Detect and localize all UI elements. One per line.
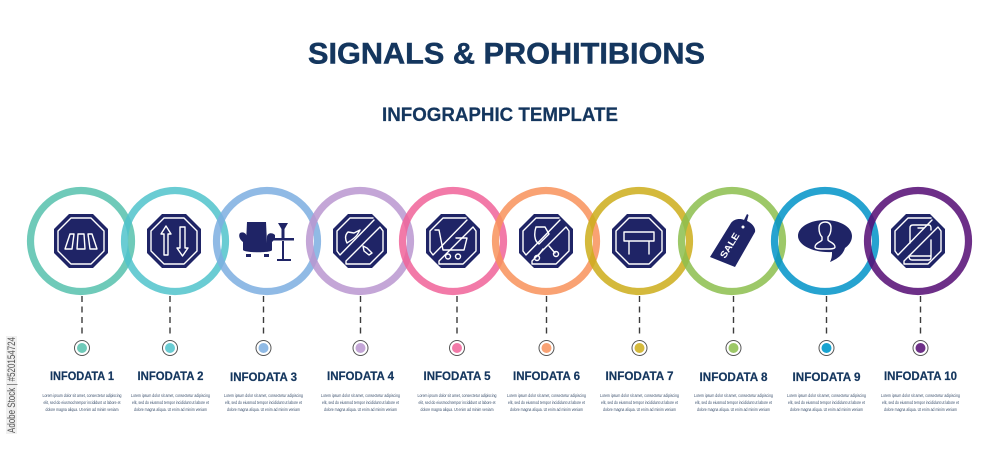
text block: infodata 10: Lorem ipsum dolor sit amet, consectetur adipiscing	[881, 393, 961, 398]
ring: infodata 7	[588, 190, 690, 292]
text block: infodata 1: INFODATA 1	[50, 371, 115, 383]
ring: infodata 8	[682, 190, 782, 292]
connector 6 with node	[539, 296, 554, 356]
icon: sale tag	[710, 214, 755, 267]
text block: infodata 7: dolore magna aliqua. Ut enim ad minim veniam	[603, 407, 676, 412]
text block: infodata 2: dolore magna aliqua. Ut enim ad minim veniam	[134, 407, 207, 412]
icon: road narrowing sign	[54, 214, 108, 268]
text block: infodata 3: INFODATA 3	[230, 372, 297, 384]
text block: infodata 9: elit, sed do eiusmod tempor incididunt ut labore et	[788, 400, 866, 405]
text block: infodata 10	[881, 371, 961, 412]
icon: person in speech bubble	[798, 220, 852, 262]
text block: infodata 5	[418, 371, 497, 412]
text block: infodata 7: Lorem ipsum dolor sit amet, consectetur adipiscing	[600, 393, 680, 398]
text block: infodata 1	[42, 371, 122, 412]
text block: infodata 3	[224, 372, 304, 412]
ring: infodata 3	[216, 190, 318, 292]
text block: infodata 3: Lorem ipsum dolor sit amet, consectetur adipiscing	[224, 393, 304, 398]
text block: infodata 6	[507, 371, 587, 412]
icon: armchair and side table	[239, 222, 294, 261]
text block: infodata 4: Lorem ipsum dolor sit amet, consectetur adipiscing	[321, 393, 401, 398]
text block: infodata 5: INFODATA 5	[424, 371, 491, 383]
icon: table sign	[612, 214, 666, 268]
text block: infodata 4	[321, 371, 401, 412]
icon: two way traffic sign	[147, 214, 201, 268]
text block: infodata 8	[694, 372, 774, 412]
text block: infodata 5: dolore magna aliqua. Ut enim ad minim veniam	[420, 407, 494, 412]
text block: infodata 2: elit, sed do eiusmod tempor incididunt ut labore et	[132, 400, 210, 405]
ring: infodata 5	[402, 190, 504, 292]
ring: infodata 9	[774, 190, 876, 292]
text block: infodata 2: Lorem ipsum dolor sit amet, consectetur adipiscing	[131, 393, 211, 398]
text block: infodata 8: dolore magna aliqua. Ut enim ad minim veniam	[697, 407, 770, 412]
text block: infodata 3: dolore magna aliqua. Ut enim ad minim veniam	[227, 407, 300, 412]
text block: infodata 5: Lorem ipsum dolor sit amet, consectetur adipiscing	[418, 393, 497, 398]
title: SIGNALS & PROHITIBIONS	[308, 38, 705, 70]
icon: no mobile phone sign	[891, 214, 945, 268]
connector 7 with node	[632, 296, 647, 356]
text block: infodata 4: INFODATA 4	[327, 371, 395, 383]
connector 9 with node	[819, 296, 834, 356]
icon: sale tag: SALE	[718, 231, 742, 261]
text block: infodata 4: dolore magna aliqua. Ut enim ad minim veniam	[324, 407, 397, 412]
icon: no baby stroller sign	[519, 214, 573, 268]
text block: infodata 6: Lorem ipsum dolor sit amet, consectetur adipiscing	[507, 393, 587, 398]
ring: infodata 1	[30, 190, 132, 292]
text block: infodata 1: elit, sed do eiusmod tempor incididunt ut labore et	[44, 400, 121, 405]
icon: no shopping cart sign	[426, 214, 480, 268]
connector 2 with node	[162, 296, 178, 356]
text block: infodata 9: INFODATA 9	[792, 372, 860, 384]
connector 1 with node	[74, 296, 90, 356]
text block: infodata 6: elit, sed do eiusmod tempor incididunt ut labore et	[508, 400, 586, 405]
text block: infodata 7	[600, 371, 680, 412]
text block: infodata 6: dolore magna aliqua. Ut enim ad minim veniam	[510, 407, 583, 412]
ring: infodata 4	[310, 190, 410, 292]
text block: infodata 9: dolore magna aliqua. Ut enim ad minim veniam	[790, 407, 863, 412]
text block: infodata 10: elit, sed do eiusmod tempor incididunt ut labore et	[882, 400, 960, 405]
connector 4 with node	[353, 296, 368, 356]
stock watermark id: Adobe Stock | #520154724	[6, 337, 18, 433]
text block: infodata 8: Lorem ipsum dolor sit amet, consectetur adipiscing	[694, 393, 774, 398]
text block: infodata 5: elit, sed do eiusmod tempor incididunt ut labore et	[418, 400, 496, 405]
text block: infodata 10: dolore magna aliqua. Ut enim ad minim veniam	[884, 407, 957, 412]
text block: infodata 2: INFODATA 2	[138, 371, 204, 383]
text block: infodata 8: elit, sed do eiusmod tempor incididunt ut labore et	[695, 400, 773, 405]
text block: infodata 9	[787, 372, 867, 412]
text block: infodata 2	[131, 371, 211, 412]
ring: infodata 2	[124, 190, 226, 292]
text block: infodata 8: INFODATA 8	[700, 372, 768, 384]
text block: infodata 3: elit, sed do eiusmod tempor incididunt ut labore et	[225, 400, 303, 405]
text block: infodata 1: Lorem ipsum dolor sit amet, consectetur adipiscing	[42, 393, 122, 398]
text block: infodata 1: dolore magna aliqua. Ut enim ad minim veniam	[46, 407, 119, 412]
text block: infodata 7: elit, sed do eiusmod tempor incididunt ut labore et	[601, 400, 679, 405]
connector 5 with node	[450, 296, 464, 356]
text block: infodata 7: INFODATA 7	[606, 371, 674, 383]
subtitle: INFOGRAPHIC TEMPLATE	[382, 105, 618, 126]
text block: infodata 10: INFODATA 10	[884, 371, 957, 383]
ring: infodata 6	[496, 190, 596, 292]
icon: no tools sign	[333, 214, 387, 268]
text block: infodata 9: Lorem ipsum dolor sit amet, consectetur adipiscing	[787, 393, 867, 398]
text block: infodata 4: elit, sed do eiusmod tempor incididunt ut labore et	[322, 400, 400, 405]
connector 10 with node	[913, 296, 928, 356]
text block: infodata 6: INFODATA 6	[513, 371, 580, 383]
ring: infodata 10	[868, 190, 968, 292]
connector 8 with node	[726, 296, 741, 356]
connector 3 with node	[256, 296, 271, 356]
